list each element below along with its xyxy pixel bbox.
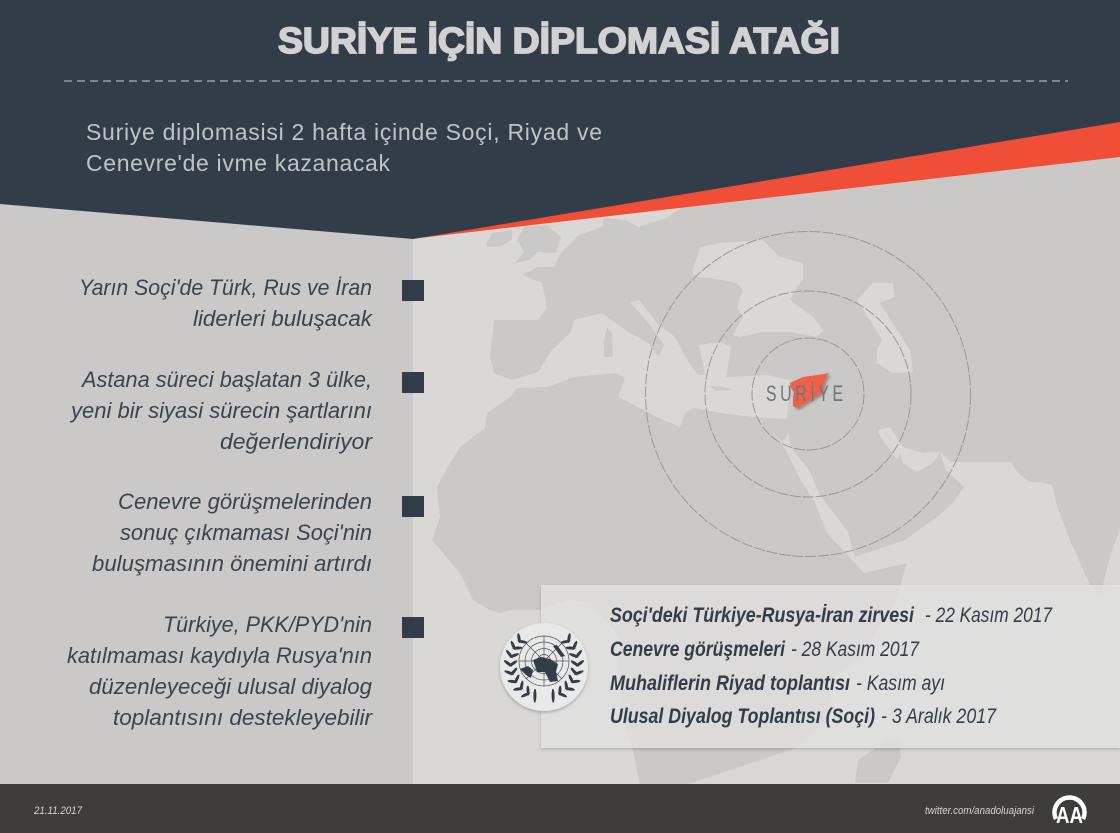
schedule rows: Muhaliflerin Riyad toplantısı (610, 672, 850, 695)
point 2: değerlendiriyor (220, 429, 374, 454)
schedule rows: - 22 Kasım 2017 (925, 604, 1053, 627)
world map (413, 205, 1120, 784)
point 1 (79, 275, 424, 331)
subtitle: Cenevre'de ivme kazanacak (86, 150, 390, 176)
icon: United Nations emblem (500, 623, 588, 711)
schedule rows: Cenevre görüşmeleri (610, 638, 786, 661)
map: Great Britain (515, 225, 561, 263)
point 1: Yarın Soçi'de Türk, Rus ve İran (79, 275, 372, 300)
point 4 (67, 612, 424, 730)
subtitle: Suriye diplomasisi 2 hafta içinde Soçi, Riyad ve (86, 119, 602, 145)
schedule rows: Soçi'deki Türkiye-Rusya-İran zirvesi (610, 604, 915, 627)
left column overlay (0, 200, 413, 790)
map: Corsica and Sardinia (604, 327, 613, 357)
panel background (541, 585, 1120, 748)
point 3: sonuç çıkmaması Soçi'nin (120, 520, 372, 545)
footer date: 21.11.2017 (33, 805, 83, 817)
target circles (646, 232, 970, 556)
point 4: toplantısını destekleyebilir (113, 705, 374, 730)
map: Crete (710, 386, 733, 391)
map: Madagascar (855, 740, 901, 783)
point 4: düzenleyeceği ulusal diyalog (89, 674, 373, 699)
point 2 (69, 367, 424, 454)
icon: Anadolu Agency logo: AA (1056, 802, 1083, 828)
map: Persian Gulf (878, 427, 940, 472)
point 2: Astana süreci başlatan 3 ülke, (80, 367, 372, 392)
point 4: Türkiye, PKK/PYD'nin (163, 612, 372, 637)
point 3: Cenevre görüşmelerinden (118, 489, 372, 514)
footer bar (0, 784, 1120, 833)
point 3 (92, 489, 424, 576)
map: Caspian Sea (857, 283, 913, 373)
point 4: katılmaması kaydıyla Rusya'nın (67, 643, 372, 668)
Syria highlighted on map (790, 373, 829, 408)
map: Red Sea and Indian Ocean (688, 432, 1120, 784)
header band (0, 0, 1120, 239)
schedule rows: Ulusal Diyalog Toplantısı (Soçi) (610, 705, 875, 728)
list of key points (67, 275, 424, 730)
schedule rows (610, 604, 1053, 728)
red accent wedge (411, 120, 1120, 239)
map: Black Sea region (692, 240, 823, 337)
schedule rows: - 28 Kasım 2017 (791, 638, 920, 661)
point 3: buluşmasının önemini artırdı (92, 551, 372, 576)
title: SURİYE İÇİN DİPLOMASİ ATAĞI (278, 20, 840, 61)
schedule rows: - 3 Aralık 2017 (881, 705, 997, 728)
point 2: yeni bir siyasi sürecin şartlarını (69, 398, 372, 423)
point 1: liderleri buluşacak (193, 306, 373, 331)
map: Ireland (487, 230, 512, 247)
schedule rows: - Kasım ayı (856, 672, 945, 695)
dashed divider (64, 80, 1068, 82)
subtitle (86, 119, 602, 176)
footer twitter handle: twitter.com/anadoluajansi (925, 805, 1034, 817)
map: Atlantic and Mediterranean (413, 205, 790, 784)
panel: meeting schedule (541, 585, 1120, 748)
map label: Suriye: SURİYE (766, 383, 843, 407)
